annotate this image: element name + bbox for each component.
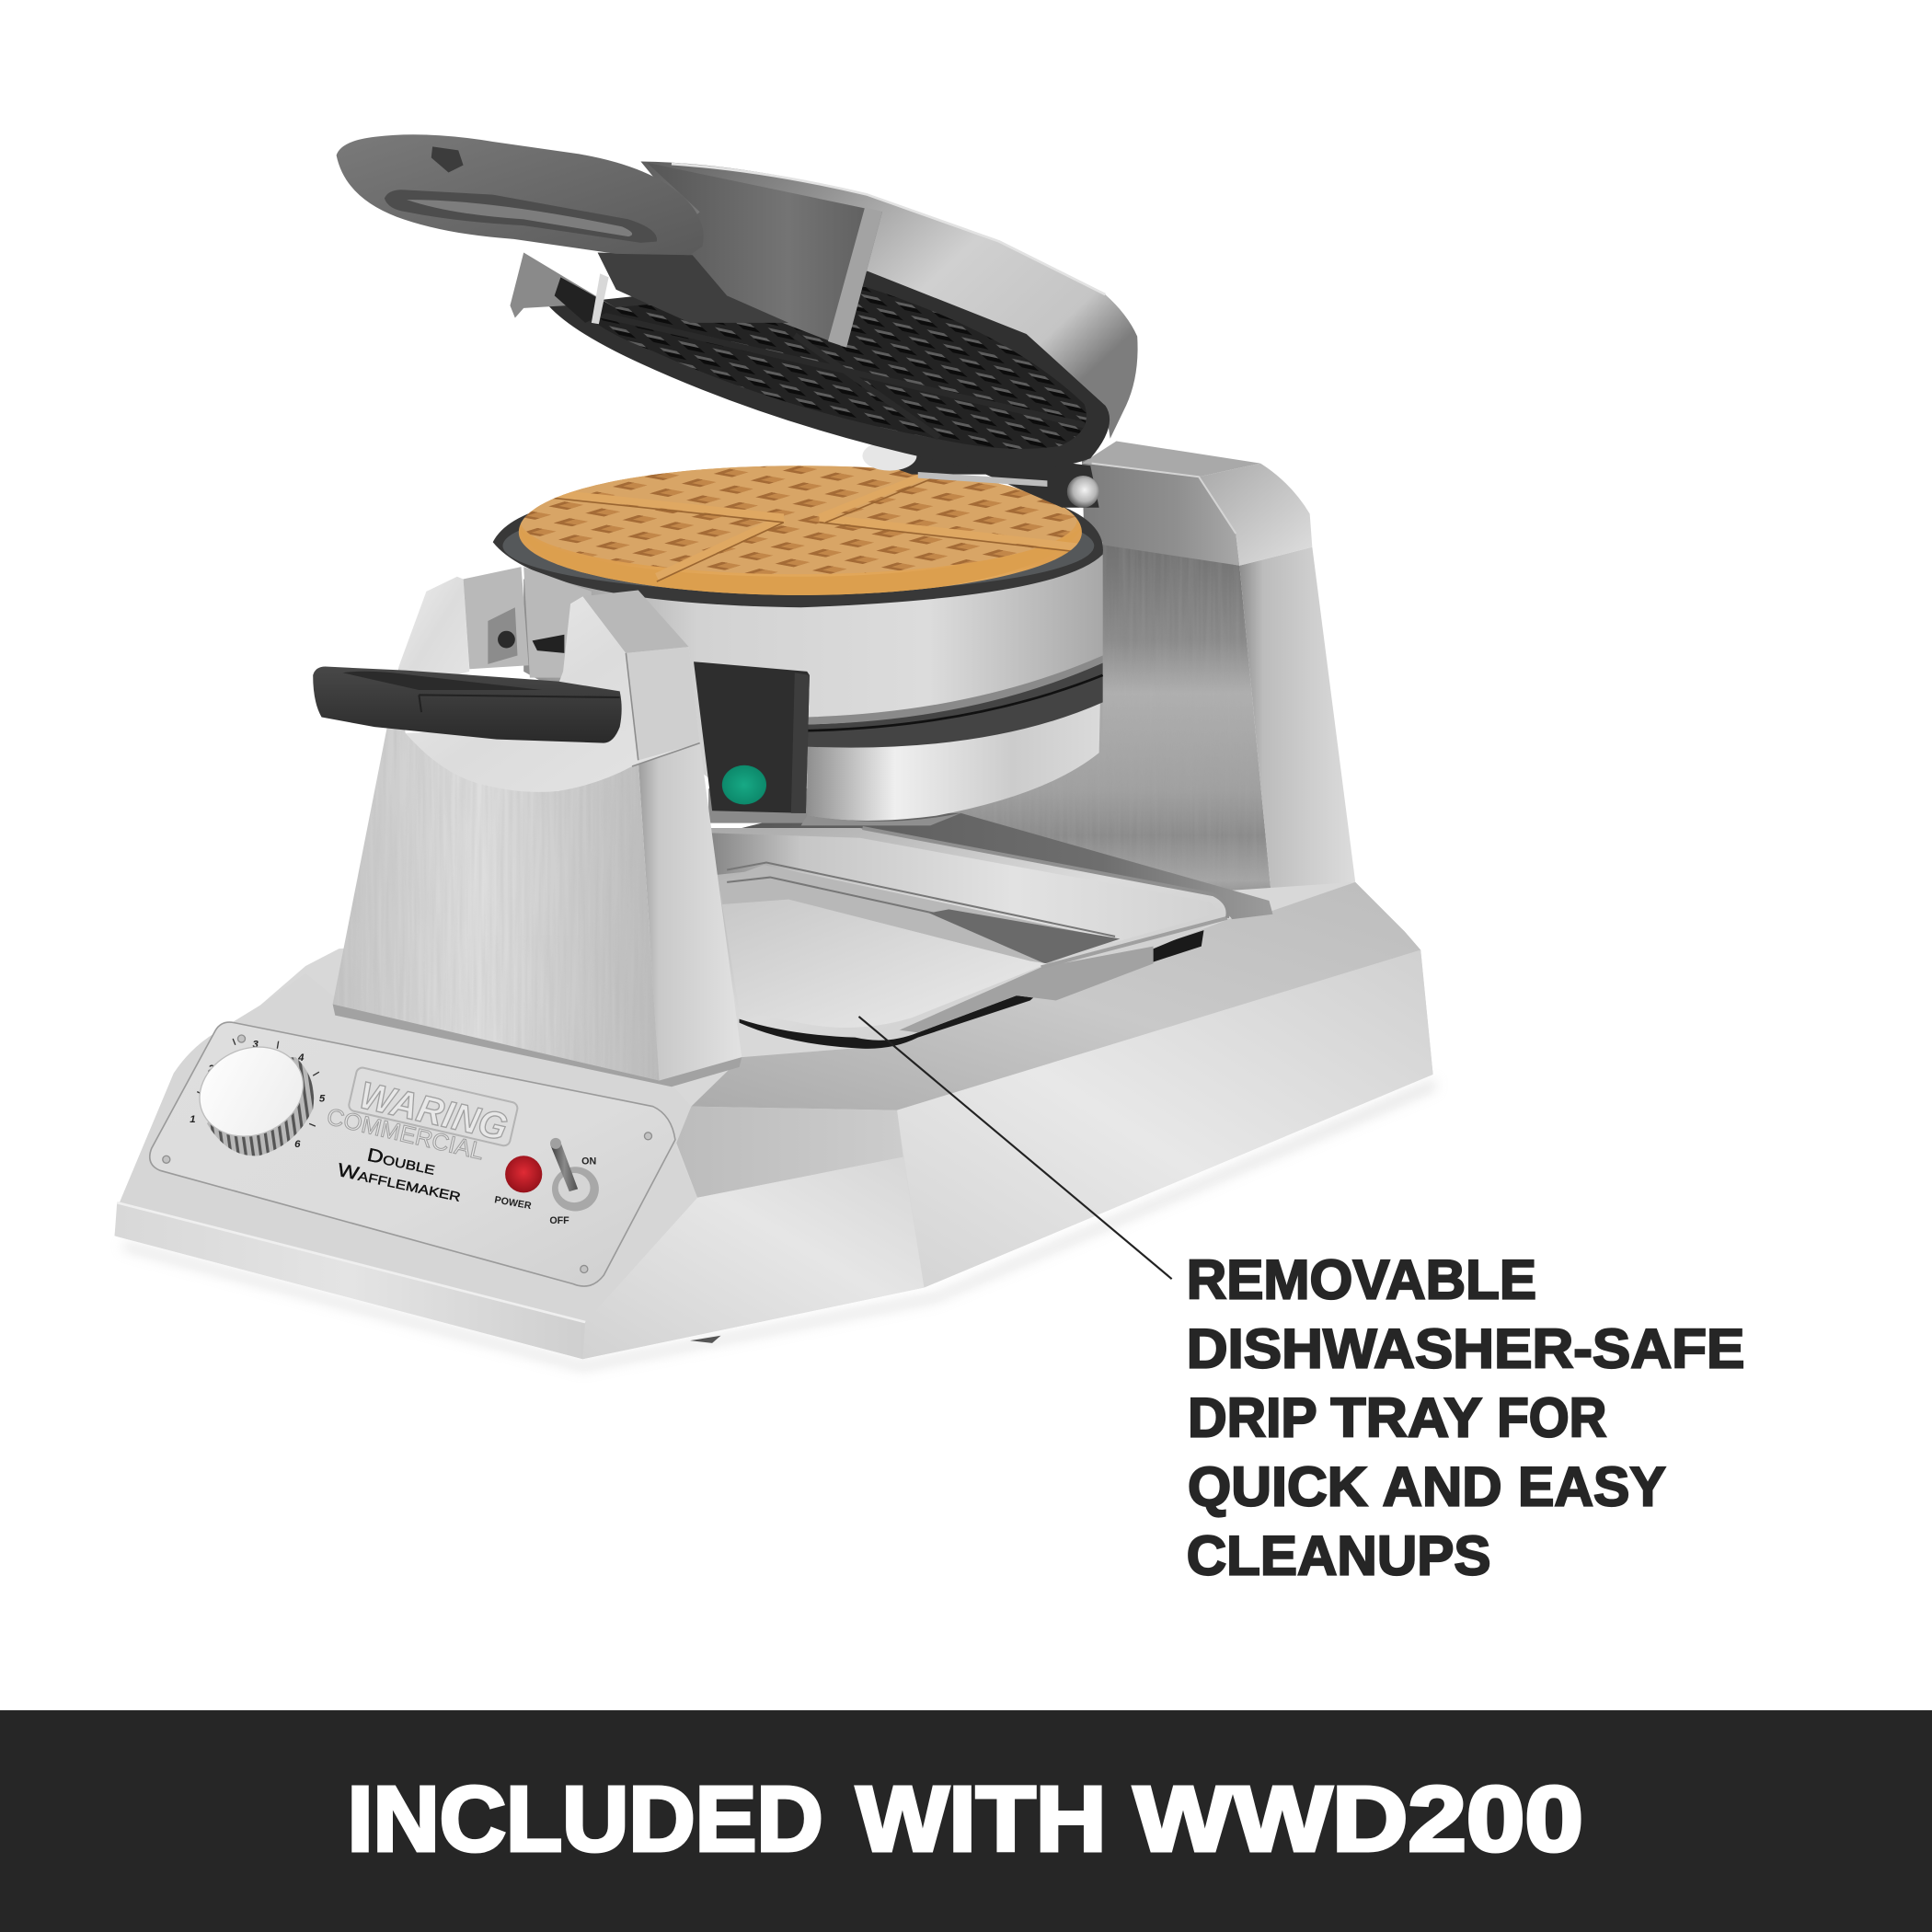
bottom skirt — [801, 813, 961, 825]
callout text: CLEANUPS — [1187, 1524, 1491, 1587]
rear post — [949, 442, 1356, 891]
black side handle — [313, 667, 622, 743]
open lid — [337, 134, 1138, 470]
plate grid — [579, 286, 1087, 449]
dial numbers: 3 — [253, 1039, 259, 1050]
slope around plate — [120, 973, 697, 1322]
banner heading: INCLUDED — [348, 1768, 823, 1871]
bracket — [647, 163, 882, 348]
dial ticks — [197, 1039, 319, 1126]
long side facet — [897, 950, 1433, 1288]
corner facet lower — [582, 1157, 924, 1359]
product name: Wafflemaker — [336, 1160, 463, 1206]
waring logo: WARING — [355, 1073, 512, 1149]
underside foot — [690, 1336, 720, 1343]
front lip — [115, 1202, 585, 1359]
post foot — [333, 1005, 742, 1087]
dark gap behind tray — [702, 813, 1272, 919]
callout leader line — [858, 1017, 1172, 1279]
post front — [333, 665, 660, 1081]
base housing — [115, 882, 1433, 1359]
back ear — [399, 577, 469, 690]
callout text: QUICK — [1188, 1455, 1368, 1518]
deck surface — [691, 882, 1420, 1110]
banner heading: WWD200 — [1133, 1768, 1583, 1871]
callout text: REMOVABLE — [1187, 1248, 1536, 1311]
callout text: AND — [1383, 1455, 1502, 1518]
lower cooking cylinder — [493, 499, 1103, 825]
lid handle — [337, 134, 704, 255]
dial numbers: 6 — [294, 1139, 301, 1150]
waffle quarter cuts — [551, 472, 1078, 577]
pivot plate — [488, 607, 517, 664]
toggle switch — [549, 1138, 599, 1226]
callout text: DISHWASHER-SAFE — [1187, 1317, 1744, 1380]
power led: POWER — [494, 1194, 533, 1212]
front post — [313, 567, 810, 1087]
control block — [694, 661, 810, 813]
dial numbers: 4 — [297, 1052, 305, 1064]
rim — [493, 505, 1103, 607]
lid hood — [640, 161, 1138, 439]
tray floor — [722, 900, 1047, 1028]
toggle switch: OFF — [549, 1215, 569, 1226]
tray ridge — [719, 865, 1114, 965]
front ear — [406, 596, 700, 792]
dark seam band — [807, 663, 1103, 748]
dial numbers: 1 — [190, 1114, 196, 1125]
latch — [510, 253, 616, 318]
dial numbers — [190, 1039, 326, 1150]
corner facet upper — [675, 1107, 903, 1198]
dial numbers: 2 — [207, 1064, 214, 1075]
knob — [186, 1032, 316, 1156]
callout text: DRIP — [1188, 1386, 1317, 1449]
tray shadow — [740, 985, 1047, 1049]
toggle switch: ON — [581, 1156, 596, 1167]
dial numbers: 5 — [319, 1093, 326, 1104]
callout text — [1187, 1248, 1744, 1587]
banner heading — [348, 1768, 1583, 1871]
waring logo — [325, 1063, 519, 1170]
power led — [494, 1156, 542, 1212]
plate screws — [163, 1035, 651, 1272]
tray pull handle — [900, 947, 1154, 1032]
tray back wall — [709, 833, 1216, 943]
control plate — [150, 1022, 675, 1286]
gap between ears — [523, 567, 592, 678]
waffle — [519, 466, 1082, 596]
plate quarter dividers — [598, 315, 1085, 437]
callout text: TRAY — [1330, 1386, 1482, 1449]
green indicator light — [722, 765, 766, 805]
post side — [638, 743, 742, 1081]
banner heading: WITH — [857, 1768, 1107, 1871]
callout text: EASY — [1518, 1455, 1666, 1518]
product name: Double — [365, 1145, 437, 1179]
waring logo: COMMERCIAL — [325, 1104, 487, 1165]
product name — [336, 1140, 467, 1206]
dark plate rim — [548, 271, 1110, 470]
callout text: FOR — [1497, 1386, 1606, 1449]
tray reflection — [929, 909, 1120, 963]
drip tray — [705, 828, 1228, 1049]
base shadow — [123, 1079, 1435, 1370]
footer banner — [0, 1710, 1932, 1932]
hinge — [863, 441, 1099, 508]
product: double waffle maker — [115, 134, 1435, 1370]
